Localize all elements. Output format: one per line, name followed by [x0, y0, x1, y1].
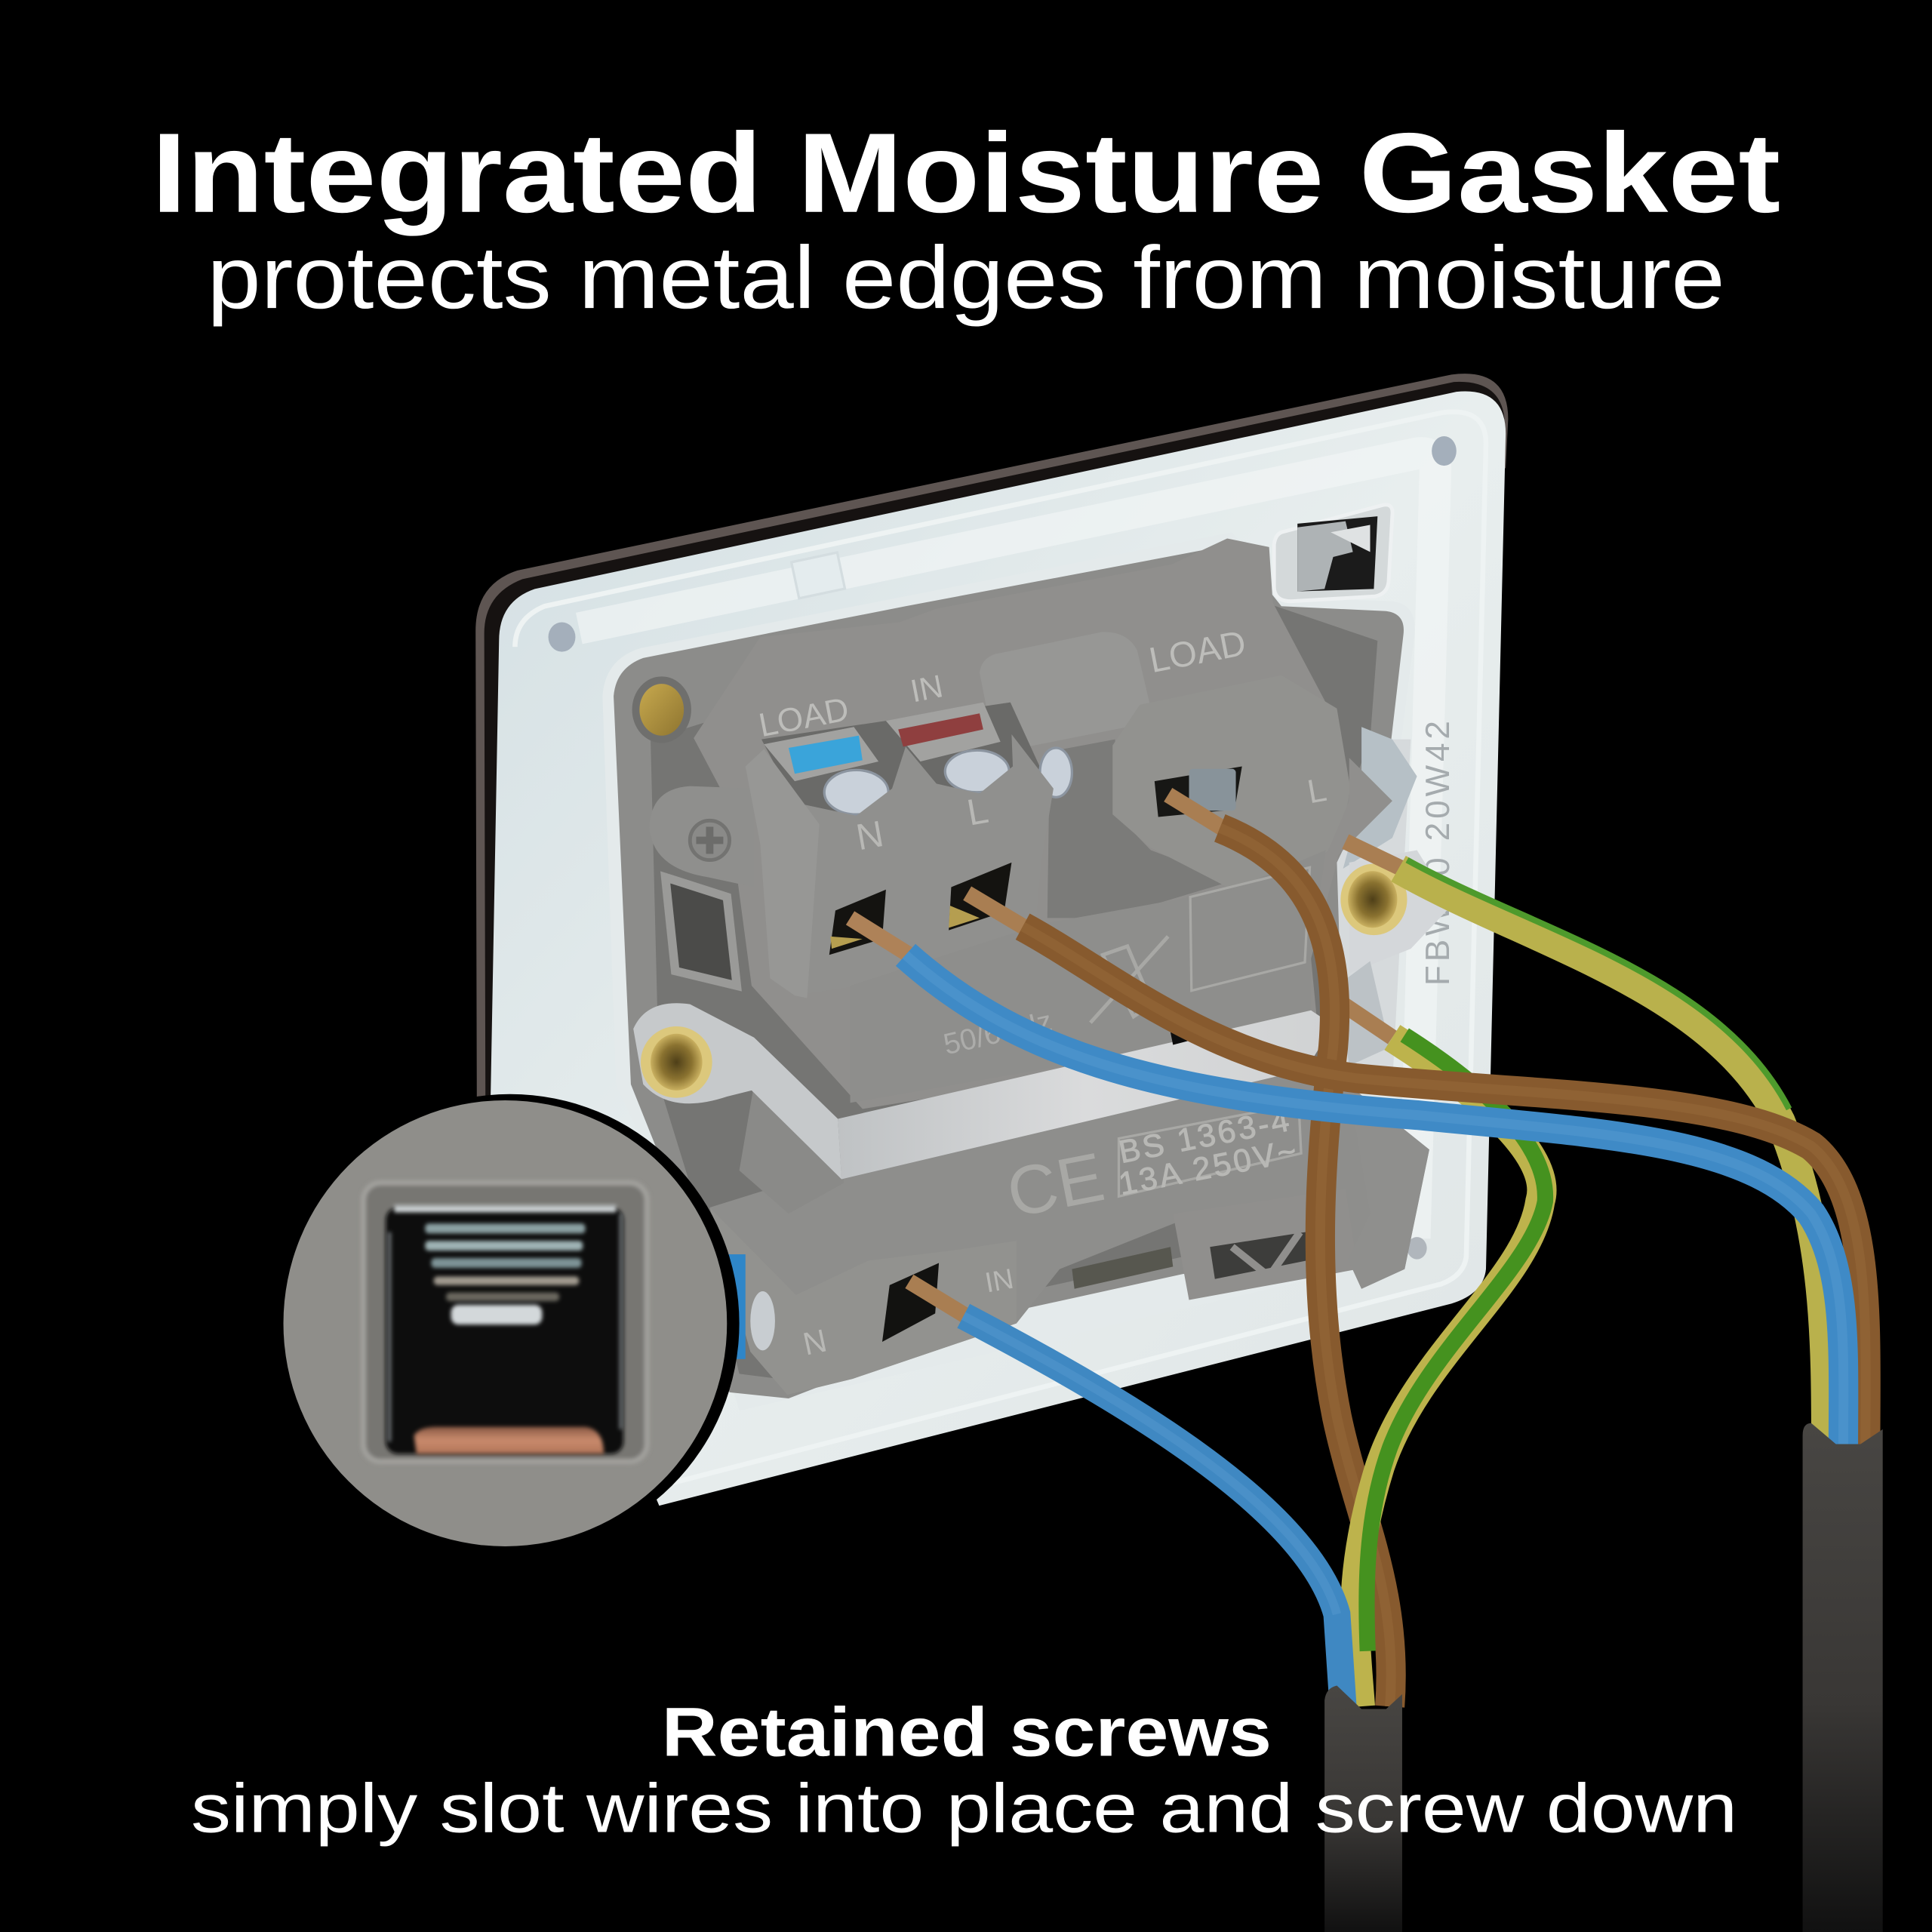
single terminal block: [1112, 675, 1350, 890]
magnifier grey disc: [284, 1100, 727, 1546]
l label: L: [964, 790, 992, 834]
neutral wire 1 copper: [851, 918, 909, 955]
lower right curved arm: [1348, 1084, 1429, 1289]
neutral wire 1: [906, 955, 1844, 1447]
lower terminal screw: [750, 1291, 775, 1350]
ce mark: CE: [1001, 1138, 1110, 1232]
weee bin mark: [1091, 937, 1168, 1023]
blue accent: [727, 1254, 746, 1359]
lower housing: [851, 851, 1326, 1103]
bezel halo: [602, 532, 1415, 1411]
heading: title: Integrated Moisture Gasket: [152, 109, 1780, 236]
faceplate metal rim: [475, 374, 1508, 1109]
earth wire 1 copper: [1346, 841, 1402, 869]
bezel inner recess: [651, 592, 1377, 1380]
lower housing column: [740, 1084, 844, 1214]
neutral terminal hole: [829, 890, 886, 955]
lower strip: [1072, 1247, 1173, 1289]
n label lower: N: [800, 1322, 830, 1362]
screw threads: [394, 1205, 616, 1324]
terminal screw heads: [824, 748, 1072, 814]
magnifier black ring: [281, 1094, 740, 1552]
housing shaded gap: [1048, 740, 1232, 918]
lug screw: [690, 820, 730, 860]
caption: body: simply slot wires into place and screw down: [191, 1770, 1737, 1847]
load label right: LOAD: [1146, 623, 1249, 681]
heading: subtitle: protects metal edges from moisture: [207, 228, 1725, 327]
gasket mounting dimple top left: [549, 622, 575, 652]
cover tab: [980, 632, 1151, 748]
in label: IN: [908, 668, 946, 709]
grey bezel: [614, 545, 1404, 1398]
caption: heading: Retained screws: [662, 1694, 1272, 1771]
gasket mounting dimple bottom right: [1407, 1237, 1427, 1260]
mounting lug with brass eyelet: [633, 1003, 841, 1179]
blue neutral marker: [764, 727, 878, 781]
in label lower: IN: [983, 1263, 1016, 1299]
opening inner highlights: [389, 1214, 621, 1441]
earth wire 2: [1355, 1035, 1546, 1706]
bs standard text: BS 1363-4: [1115, 1102, 1292, 1170]
earth terminal window: [1274, 505, 1392, 601]
right silver plate area: [1337, 740, 1411, 1084]
rating text: 50/60Hz: [940, 1005, 1055, 1061]
bracket gap: [1171, 1025, 1201, 1044]
amp rating text: 13A 250V~: [1115, 1133, 1299, 1202]
brass terminal inserts: [830, 906, 980, 949]
load label left: LOAD: [756, 691, 852, 744]
lower terminal block: [709, 1208, 1017, 1395]
lower terminal hole: [882, 1263, 939, 1342]
live wire 2 copper: [1168, 795, 1223, 828]
lower right clip: [1173, 1189, 1358, 1300]
live terminal hole: [949, 863, 1011, 931]
copper wire end: [414, 1427, 604, 1454]
lower grey housing: [709, 1069, 1429, 1395]
gasket inner ridge: [579, 453, 1435, 1238]
magnified detail: retained screw: [281, 1094, 740, 1552]
screw lug left: [649, 786, 754, 888]
main grey housing: [694, 538, 1350, 1109]
switched socket rear assembly: [475, 374, 1508, 1506]
earth terminal tag: [1328, 727, 1417, 869]
embossed code: FBWA0 20W42: [1420, 721, 1457, 986]
housing recess panel: [1190, 867, 1310, 991]
gasket outer lip: [515, 412, 1486, 1484]
rivet: [632, 676, 691, 743]
earth post right: [1340, 851, 1451, 974]
twin terminal block: [746, 734, 1054, 995]
cable right: [1803, 1423, 1883, 1932]
neutral wire 2 copper: [909, 1281, 966, 1316]
live wire 2: [1220, 828, 1391, 1706]
moisture gasket: [491, 392, 1506, 1506]
red live marker: [886, 703, 1001, 761]
cable centre: [1324, 1685, 1402, 1932]
live wire 1 copper: [968, 894, 1025, 928]
earth screw lower: [1337, 961, 1390, 1066]
terminal opening: [386, 1208, 623, 1454]
terminal opening surround: [364, 1183, 647, 1461]
bs rating box: [1118, 1104, 1301, 1196]
neutral wire 2: [964, 1316, 1343, 1706]
single terminal screw: [1189, 769, 1236, 811]
live wire 1: [1023, 927, 1866, 1447]
gasket tab: [792, 552, 845, 598]
metal bracket front: [838, 1011, 1334, 1179]
earth wire 1: [1398, 860, 1826, 1447]
twin block side face: [746, 749, 820, 998]
cable clip: [666, 877, 737, 986]
recess behind markers: [761, 703, 1050, 838]
gasket mounting dimple top right: [1432, 436, 1457, 466]
faceplate rim dark inset: [485, 382, 1504, 1109]
earth wire 2 copper: [1343, 1004, 1392, 1038]
single terminal hole: [1155, 767, 1242, 817]
l label right: L: [1305, 771, 1329, 811]
wires: [851, 795, 1866, 1706]
n label: N: [853, 814, 887, 858]
